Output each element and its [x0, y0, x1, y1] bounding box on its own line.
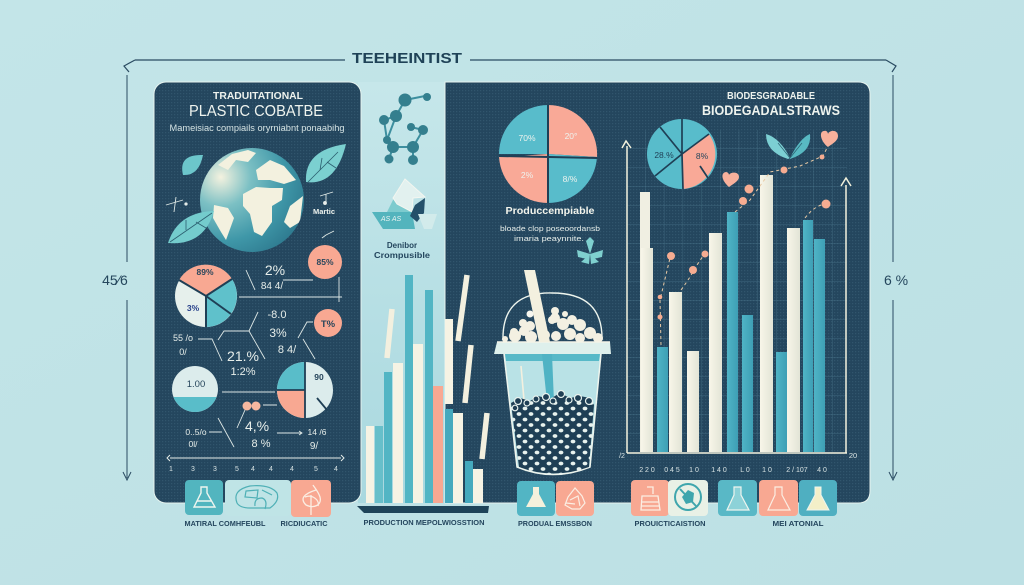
dashed trend lines	[660, 146, 828, 345]
label: production: PRODUCTION MEPOLWIOSSTION	[364, 518, 484, 527]
axes	[622, 141, 851, 453]
pie chart: production: 8/%	[563, 174, 578, 184]
pie chart: production	[499, 105, 597, 203]
icon: no-symbol tile	[668, 480, 708, 516]
value labels: 8 4/	[278, 344, 297, 356]
x axis labels: /2	[619, 453, 625, 460]
value labels: 8 %	[252, 438, 271, 450]
cup dome	[503, 293, 602, 340]
header frame with title	[124, 50, 896, 72]
chart: biodegradable bars	[619, 141, 857, 474]
x axis labels: 20	[849, 451, 857, 460]
pie chart: production: 2%	[521, 170, 534, 180]
teal straw	[542, 354, 554, 402]
number line axis: 1	[169, 466, 173, 473]
icon: teal cream flask tile	[799, 480, 837, 516]
text: Denibor Crompusible: Denibor	[387, 241, 417, 250]
icon: twin leaves	[766, 134, 810, 159]
panel heading: traditional plastic: PLASTIC COBATBE	[189, 103, 323, 120]
x axis labels	[619, 451, 857, 474]
icon: globe	[200, 148, 304, 252]
pie chart: lower right: 90	[314, 372, 324, 382]
value labels: 1:2%	[230, 366, 256, 378]
pie chart: upper left	[175, 265, 237, 327]
inner highlight	[521, 366, 530, 468]
panel heading: traditional plastic: TRADUITATIONAL	[213, 91, 303, 102]
label: production cast: PROUICTICAISTION	[634, 519, 706, 528]
value labels	[173, 262, 327, 452]
pie chart: upper left: 89%	[196, 267, 214, 277]
boba beads	[511, 390, 595, 474]
number line axis: 4	[251, 466, 255, 473]
gauge circle: 1.00	[172, 366, 218, 412]
value labels: 2%	[265, 262, 285, 278]
pie chart: upper left: 3%	[187, 303, 200, 313]
label: product emission: PRODUAL EMSSBON	[518, 519, 592, 528]
value labels: 21.%	[227, 348, 259, 364]
number line axis: 4	[269, 466, 273, 473]
cream straw	[524, 270, 550, 342]
x axis labels: L 0	[740, 467, 750, 474]
panel heading: traditional plastic	[170, 91, 344, 134]
connector dots	[242, 402, 260, 410]
value labels: 14 /6	[308, 427, 327, 437]
icon: pink flask tile	[759, 480, 798, 516]
icon: heart upper right	[821, 131, 838, 147]
panel heading: biodegradable: BIODEGADALSTRAWS	[702, 102, 840, 118]
text: production description	[500, 206, 600, 243]
callout: 85% circle	[308, 245, 342, 279]
icon: pink molecule tile	[291, 480, 331, 517]
icon: flask teal center	[517, 481, 555, 516]
icon: heart middle	[722, 172, 739, 187]
callout: 85% circle: 85%	[316, 257, 334, 267]
x axis labels: 1 0	[689, 467, 699, 474]
label: Martic: Martic	[313, 207, 335, 216]
x axis labels: 4 0	[817, 467, 827, 474]
value labels: 0/	[179, 347, 187, 357]
value labels: 0l/	[189, 439, 198, 449]
icon: leaf upper right	[306, 144, 346, 182]
icon: pink cluster tile	[556, 481, 594, 516]
x axis labels: 2 2 0	[639, 467, 655, 474]
callout: T% circle: T%	[321, 319, 336, 330]
number line axis: 5	[235, 466, 239, 473]
gauge circle: 1.00: 1.00	[187, 379, 205, 390]
x axis labels: 1 4 0	[711, 467, 727, 474]
value labels: 3%	[269, 326, 287, 340]
value labels: 4,%	[245, 418, 269, 434]
number line axis: 3	[213, 466, 217, 473]
icon: pink stack tile	[631, 480, 669, 516]
floating straws	[387, 275, 487, 459]
number line axis: 4	[290, 466, 294, 473]
label: material: MATIRAL COMHFEUBL	[184, 519, 266, 528]
pie chart: production: 20°	[565, 131, 577, 141]
pie chart: lower right	[277, 362, 333, 418]
callout: T% circle	[314, 309, 342, 337]
number line axis: 5	[314, 466, 318, 473]
pie chart: production: 70%	[518, 133, 536, 143]
left scale arrow with value: 45⁄6	[102, 272, 128, 288]
pie chart: composition: 28.%	[654, 150, 674, 160]
value labels: 55 /o	[173, 333, 193, 343]
header frame with title: TEEHEINTIST	[352, 50, 462, 67]
panel heading: traditional plastic: Mameisiac compiails oryrniabnt ponaabihg	[170, 123, 344, 134]
pie chart: composition	[647, 119, 717, 189]
bar chart: production emissions	[366, 275, 487, 503]
x axis labels: 0 4 5	[664, 467, 680, 474]
left scale arrow with value	[102, 75, 131, 480]
number line axis: 4	[334, 466, 338, 473]
cup rim	[494, 342, 611, 354]
connector lines	[198, 270, 342, 447]
value labels: -8.0	[268, 309, 286, 321]
text: production description: imaria peaynnite.	[514, 234, 584, 243]
right scale arrow with value: 6 %	[884, 272, 908, 288]
text: production description: bloade clop poseoordansb	[500, 224, 600, 233]
label: biodiucatic: RICDIUCATIC	[280, 519, 328, 528]
text: Denibor Crompusible	[374, 241, 431, 260]
icon: car tile	[225, 480, 291, 516]
text: production description: Produccempiable	[506, 206, 595, 217]
x axis labels: 1 0	[762, 467, 772, 474]
panel heading: biodegradable: BIODESGRADABLE	[727, 91, 815, 102]
panel: middle light column	[358, 82, 448, 503]
illustration: bubble tea cup	[494, 270, 611, 478]
icon: flask teal left	[185, 480, 223, 515]
label: material national: MEI ATONIAL	[772, 519, 824, 528]
trend points	[658, 154, 830, 320]
text: Denibor Crompusible: Crompusible	[374, 251, 431, 260]
icon: leaf upper left	[182, 155, 203, 175]
number line axis: 3	[191, 466, 195, 473]
x axis labels: 2 / 107	[786, 467, 808, 474]
value labels: 84 4/	[261, 281, 283, 292]
bars	[640, 175, 825, 452]
cup body	[504, 354, 601, 474]
chart base	[357, 506, 489, 513]
panel heading: biodegradable	[702, 91, 840, 118]
foam	[502, 307, 603, 343]
number line axis	[167, 455, 344, 473]
icon: recycling triangle	[372, 179, 437, 229]
value labels: 0..5/o	[185, 427, 207, 437]
right scale arrow with value	[884, 75, 908, 480]
icon: teal flask tile	[718, 480, 757, 516]
icon: recycling triangle: AS AS	[380, 216, 402, 223]
panel: biodegradable straws	[445, 82, 870, 503]
value labels: 9/	[310, 441, 318, 452]
decorative annotations around globe	[166, 192, 334, 238]
icon: molecule	[379, 93, 431, 165]
icon: flower	[577, 237, 603, 264]
pie chart: composition: 8%	[696, 151, 709, 161]
panel: traditional plastic	[154, 82, 361, 503]
icon: leaf lower left	[168, 211, 214, 243]
